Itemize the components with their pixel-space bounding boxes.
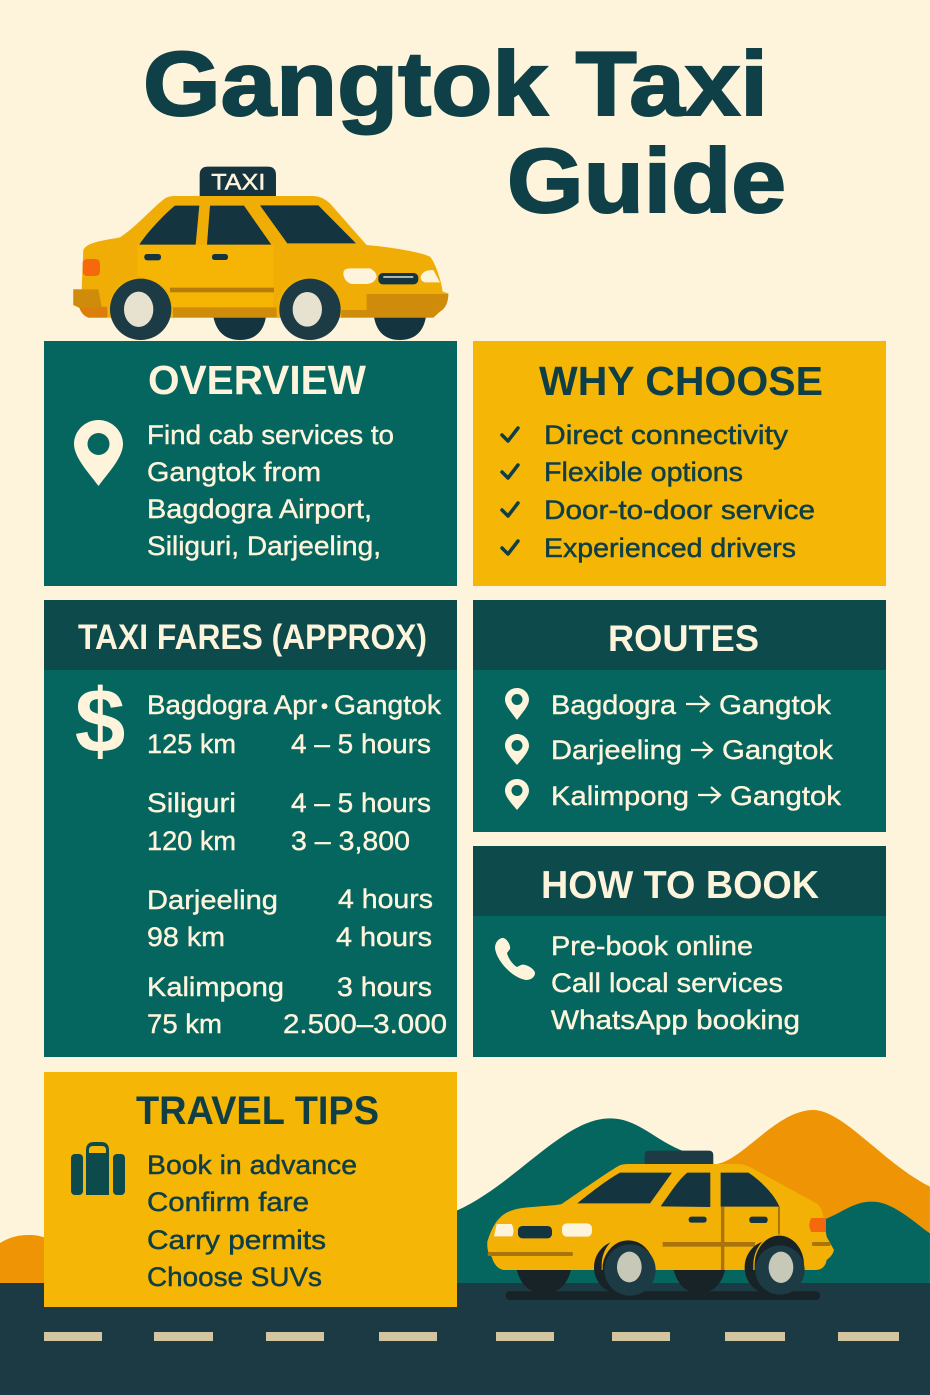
door handles and trim xyxy=(144,254,161,260)
heading: routes: ROUTES xyxy=(608,618,759,659)
panel: overview xyxy=(44,341,457,586)
fare rows: 120 km xyxy=(147,826,236,856)
headlights and grille xyxy=(494,1224,514,1236)
booking list xyxy=(551,931,800,1035)
tips list: Book in advance xyxy=(147,1150,357,1180)
overview text: Find cab services to xyxy=(147,420,394,450)
fare rows: Siliguri xyxy=(147,788,236,818)
tips list xyxy=(147,1150,357,1292)
overview text: Siliguri, Darjeeling, xyxy=(147,531,381,561)
header band xyxy=(44,600,457,670)
front wheel xyxy=(594,1241,646,1294)
heading: taxi fares: TAXI FARES (APPROX) xyxy=(78,618,427,657)
heading: travel tips: TRAVEL TIPS xyxy=(136,1089,379,1133)
door panels xyxy=(137,245,273,307)
fare rows: 4 hours xyxy=(338,884,433,914)
fare rows: 4 – 5 hours xyxy=(291,729,431,759)
icon: phone xyxy=(495,938,535,980)
route list xyxy=(551,690,842,811)
tips list: Carry permits xyxy=(147,1225,326,1255)
route list: Bagdogra xyxy=(551,690,677,720)
route list: Gangtok xyxy=(719,690,832,720)
fare rows: 125 km xyxy=(147,729,236,759)
tips list: Confirm fare xyxy=(147,1187,309,1217)
fare rows: 4 hours xyxy=(336,922,432,952)
overview text xyxy=(147,420,394,561)
heading: how to book: HOW TO BOOK xyxy=(541,864,819,907)
illustration: taxi on road xyxy=(487,1151,834,1300)
front wheel xyxy=(108,277,173,318)
road dashes xyxy=(44,1332,899,1341)
header band xyxy=(473,600,886,670)
door seams and trim xyxy=(488,1207,831,1270)
why choose list: Direct connectivity xyxy=(544,420,789,450)
roof taxi sign: TAXI xyxy=(211,169,265,194)
fare rows: Gangtok xyxy=(334,690,442,720)
lower sill and bumper shading xyxy=(167,307,280,318)
mountain: right teal xyxy=(803,1202,930,1287)
fare rows: 3 hours xyxy=(337,972,432,1002)
windows xyxy=(139,205,356,245)
fare rows xyxy=(147,690,447,1039)
roof sign xyxy=(645,1151,713,1165)
mountain: far left orange xyxy=(0,1235,46,1285)
icons: route pins xyxy=(505,688,529,810)
heading: overview: OVERVIEW xyxy=(148,357,366,403)
title: Guide xyxy=(507,131,786,232)
checkmarks xyxy=(502,428,518,554)
windows xyxy=(577,1173,779,1207)
header band xyxy=(473,846,886,916)
fare rows: 3 – 3,800 xyxy=(291,826,410,856)
icon: map pin xyxy=(74,420,123,486)
heading: why choose: WHY CHOOSE xyxy=(539,358,823,404)
title xyxy=(143,34,786,232)
mountain: right orange xyxy=(717,1110,930,1277)
route list: Kalimpong xyxy=(551,781,689,811)
booking list: Call local services xyxy=(551,968,783,998)
icon: suitcase xyxy=(71,1142,125,1195)
why choose list: Experienced drivers xyxy=(544,533,796,563)
route list: Darjeeling xyxy=(551,735,682,765)
route list: Gangtok xyxy=(730,781,842,811)
door handles xyxy=(689,1217,707,1223)
icon: dollar: $ xyxy=(75,671,125,772)
tips list: Choose SUVs xyxy=(147,1262,322,1292)
fare rows: • xyxy=(321,696,328,718)
why choose list: Door-to-door service xyxy=(544,495,815,525)
far-side wheels xyxy=(213,317,426,340)
fare rows: 4 – 5 hours xyxy=(291,788,431,818)
fare rows: Kalimpong xyxy=(147,972,284,1002)
ground shadow xyxy=(506,1291,820,1300)
booking list: WhatsApp booking xyxy=(551,1005,800,1035)
overview text: Gangtok from xyxy=(147,457,321,487)
panel: travel tips xyxy=(44,1072,457,1307)
illustration: taxi on top of overview panel xyxy=(73,167,448,340)
headlights and grille xyxy=(343,268,377,284)
panel: routes xyxy=(473,600,886,832)
tail light xyxy=(809,1218,826,1232)
mountain: centre teal xyxy=(457,1118,817,1283)
panel: why choose xyxy=(473,341,886,586)
why choose list: Flexible options xyxy=(544,457,743,487)
route list: Gangtok xyxy=(722,735,834,765)
scene: mountains and road xyxy=(0,1110,930,1395)
far-side wheels xyxy=(516,1267,726,1293)
fare rows: 2.500–3.000 xyxy=(283,1009,447,1039)
roof taxi sign xyxy=(200,167,276,197)
title: Gangtok Taxi xyxy=(143,34,768,135)
car body xyxy=(73,196,448,318)
route arrows xyxy=(686,696,720,803)
tail light xyxy=(83,259,100,276)
why choose list xyxy=(544,420,815,563)
booking list: Pre-book online xyxy=(551,931,753,961)
overview text: Bagdogra Airport, xyxy=(147,494,372,524)
fare rows: 75 km xyxy=(147,1009,222,1039)
panel: how to book xyxy=(473,846,886,1057)
fare rows: Darjeeling xyxy=(147,885,278,915)
rear wheel xyxy=(277,277,341,318)
road xyxy=(0,1283,930,1395)
panel: taxi fares xyxy=(44,600,457,1057)
fare rows: 98 km xyxy=(147,922,225,952)
fare rows: Bagdogra Apr xyxy=(147,690,317,720)
car body xyxy=(487,1164,834,1270)
rear wheel xyxy=(745,1241,795,1294)
